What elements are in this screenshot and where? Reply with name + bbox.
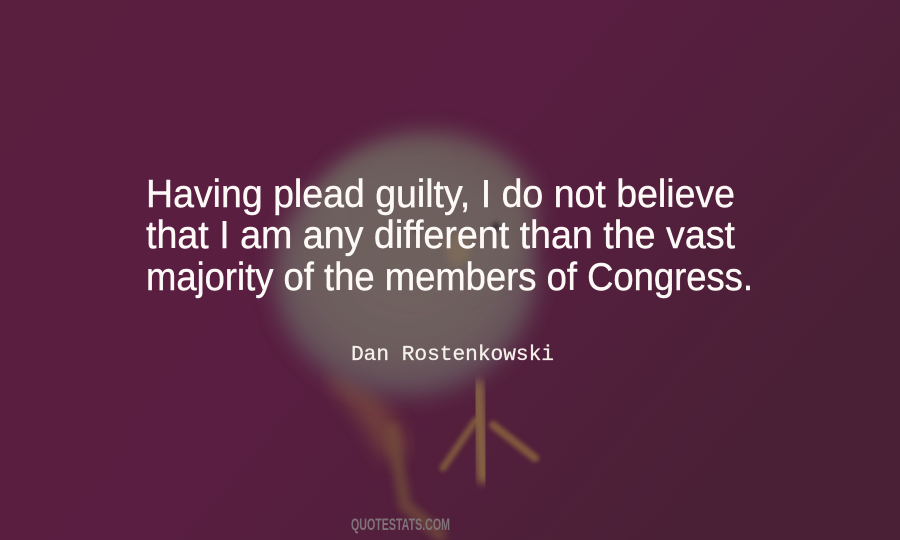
author name: Dan Rostenkowski	[351, 344, 554, 367]
quote text: that I am any different than the vast	[146, 214, 735, 257]
watermark: QUOTESTATS.COM	[351, 515, 450, 534]
quote text: majority of the members of Congress.	[146, 256, 753, 299]
chick beak	[446, 234, 470, 266]
chick body	[273, 153, 537, 397]
quote text	[146, 173, 753, 299]
photo: blurred chick	[273, 132, 537, 535]
chick head	[320, 132, 536, 292]
quote text: Having plead guilty, I do not believe	[146, 173, 735, 216]
chick legs and feet	[345, 380, 535, 535]
chick eyes	[414, 222, 500, 232]
